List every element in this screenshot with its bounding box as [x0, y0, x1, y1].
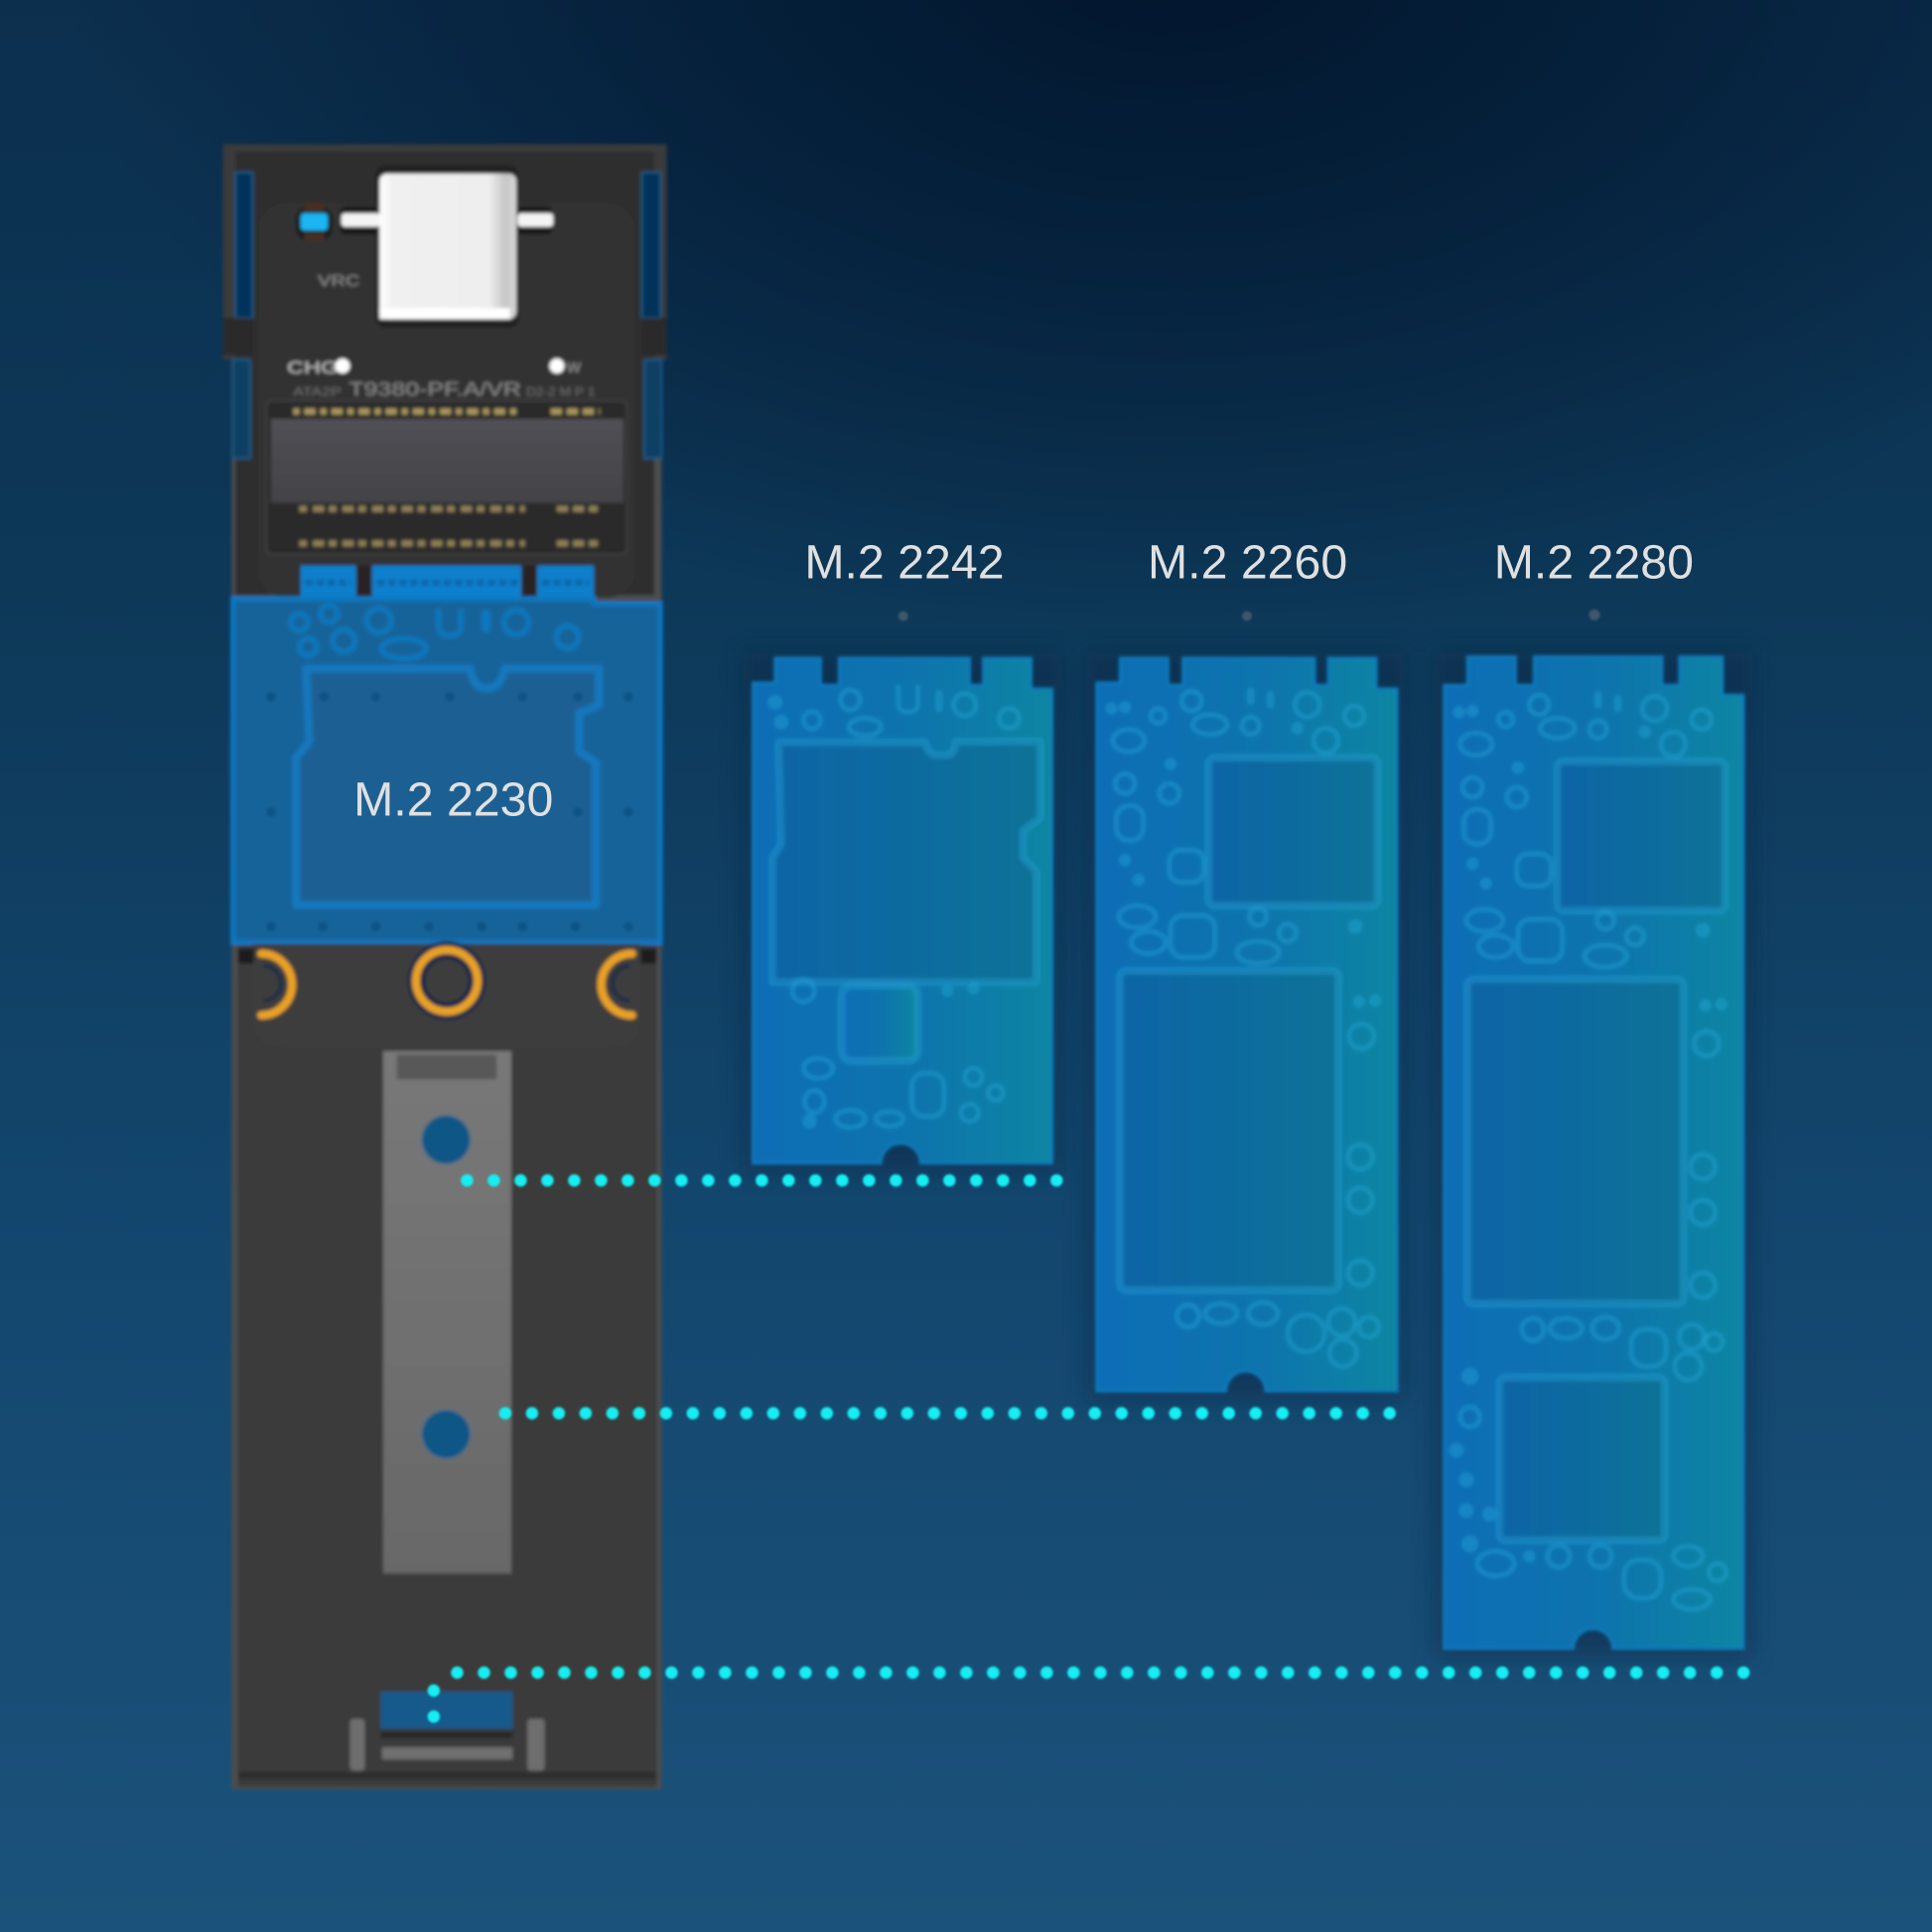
- label: M.2 2260: M.2 2260: [1148, 536, 1347, 590]
- label: M.2 2280: M.2 2280: [1494, 536, 1694, 590]
- PCB silkscreen text: [287, 272, 596, 400]
- clip dots: [429, 1691, 439, 1724]
- enclosure body: [223, 144, 666, 1789]
- grey metal strip: [383, 1051, 511, 1574]
- status LED: [296, 204, 333, 240]
- gold screw rings: [261, 944, 632, 1018]
- USB-C connector: [341, 165, 553, 328]
- line to M.2 2242: [467, 1175, 1064, 1185]
- panel: M.2 2280 card: [1445, 536, 1743, 1649]
- panel: M.2 2260 card: [1097, 536, 1397, 1391]
- mounting plate: [238, 944, 656, 1047]
- PCB silkscreen text: ATA2P: [293, 384, 342, 398]
- panel: M.2 2242 card: [753, 536, 1052, 1164]
- line to M.2 2260: [505, 1409, 1396, 1419]
- PCB silkscreen text: T9380-PF.A/VR: [348, 378, 521, 400]
- dotted guide lines: [434, 1180, 1744, 1724]
- panel: M.2 2230 blue drive: [233, 566, 660, 942]
- bottom clip: [349, 1692, 545, 1770]
- PCB silkscreen text: CHG: [287, 357, 339, 377]
- label: M.2 2242: M.2 2242: [804, 536, 1005, 590]
- label: M.2 2230: M.2 2230: [353, 773, 553, 827]
- PCB silkscreen text: W: [567, 360, 581, 376]
- side windows: [223, 173, 666, 459]
- label tick dots: [898, 610, 1600, 621]
- card shadows: [743, 653, 1752, 1657]
- PCB silkscreen text: D2-2 M P 1: [526, 384, 596, 398]
- PCB silkscreen text: VRC: [318, 272, 360, 290]
- M.2 socket: [266, 400, 627, 554]
- panel: SSD enclosure: [223, 144, 666, 1789]
- line to M.2 2280: [457, 1668, 1744, 1678]
